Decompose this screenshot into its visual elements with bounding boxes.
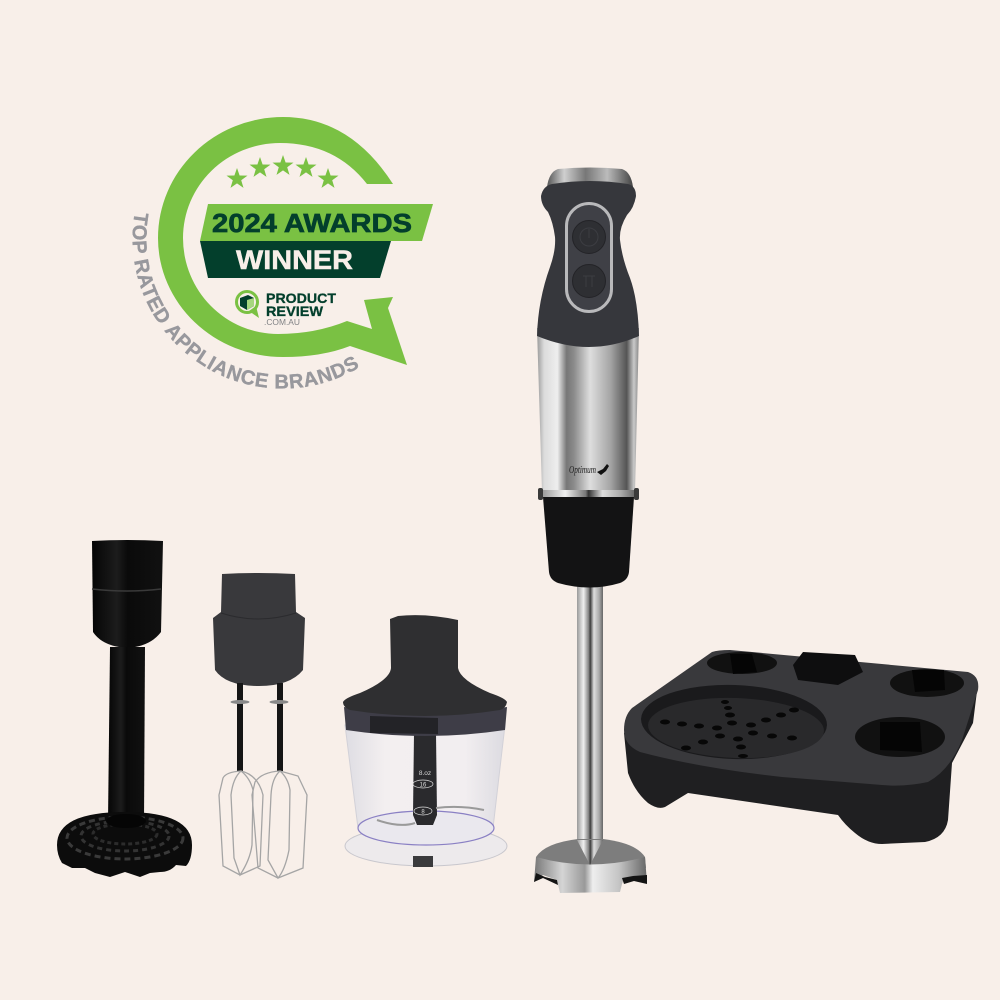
speech bubble ring <box>158 117 407 365</box>
lid band <box>344 707 507 736</box>
shaft <box>577 580 603 848</box>
dark banner: winner <box>200 241 391 278</box>
product review logo: PRODUCT <box>266 290 336 306</box>
chopper bowl <box>345 725 505 840</box>
steel body <box>537 328 639 492</box>
brand signature: Optimum <box>569 465 596 476</box>
whisk wires <box>219 771 307 878</box>
front-right socket <box>855 717 945 757</box>
button panel <box>566 204 612 312</box>
product review logo <box>236 290 336 327</box>
chrome top cap <box>547 168 633 187</box>
masher attachment <box>57 540 192 877</box>
masher base <box>57 812 192 877</box>
black lid and neck <box>343 615 507 716</box>
big recess with drain holes <box>640 682 828 762</box>
rear-right socket <box>890 669 964 697</box>
octagonal socket <box>793 652 863 685</box>
stick blender <box>534 168 647 893</box>
tray side wall <box>624 683 978 844</box>
curved caption: TOP RATED APPLIANCE BRANDS <box>132 214 358 389</box>
chopper base ring <box>345 826 507 867</box>
centre stem: 8 <box>421 810 425 816</box>
black collar <box>543 497 634 588</box>
small rear-left socket <box>707 652 777 674</box>
chopper attachment <box>343 615 507 867</box>
chrome ring and clips <box>538 488 639 500</box>
green banner: 2024 awards: 2024 AWARDS <box>212 208 412 238</box>
masher head <box>92 540 163 647</box>
blade guard base <box>534 839 647 893</box>
product review logo: .COM.AU <box>264 318 300 327</box>
dark rubber handle <box>537 181 639 347</box>
tray top surface <box>624 650 978 786</box>
product review logo: REVIEW <box>266 303 324 319</box>
green banner: 2024 awards <box>200 204 433 241</box>
whisk rods <box>230 683 288 771</box>
award badge <box>132 117 433 389</box>
storage tray <box>624 650 978 844</box>
centre stem: 16 <box>420 782 427 788</box>
whisk housing <box>213 573 305 686</box>
centre stem <box>377 733 484 825</box>
dark banner: winner: WINNER <box>236 245 353 275</box>
five stars <box>226 155 338 188</box>
masher stem <box>108 647 145 822</box>
bowl bottom tint <box>358 811 494 845</box>
whisk attachment <box>213 573 307 878</box>
centre stem: 8.oz <box>419 770 431 777</box>
